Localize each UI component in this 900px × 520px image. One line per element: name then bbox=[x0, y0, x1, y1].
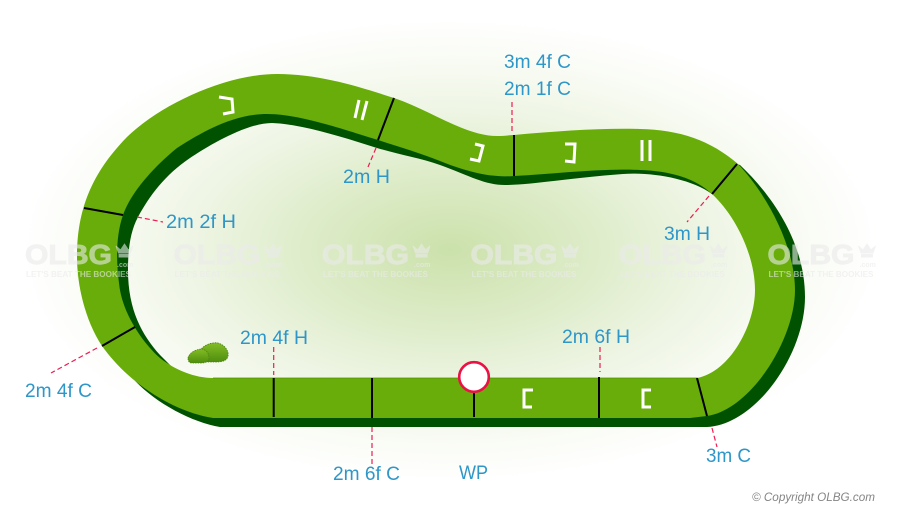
watermarks: OLBG bbox=[619, 239, 706, 270]
racetrack bbox=[77, 74, 805, 427]
watermarks: LET'S BEAT THE BOOKIES bbox=[768, 269, 874, 279]
watermarks: OLBG bbox=[322, 239, 409, 270]
watermarks: .com bbox=[562, 262, 579, 269]
watermarks: OLBG bbox=[470, 239, 558, 270]
watermarks bbox=[25, 239, 876, 279]
watermarks: OLBG bbox=[768, 239, 854, 270]
watermarks: OLBG bbox=[25, 239, 112, 270]
watermarks: LET'S BEAT THE BOOKIES bbox=[174, 269, 280, 279]
distance labels: 2m 6f C bbox=[333, 464, 400, 485]
distance labels: WP bbox=[459, 463, 488, 484]
dashed leader lines bbox=[51, 102, 717, 465]
watermarks: .com bbox=[266, 262, 282, 269]
distance labels: 2m 4f C bbox=[25, 381, 92, 402]
distance labels: 2m 6f H bbox=[562, 327, 630, 348]
watermarks: OLBG bbox=[174, 239, 260, 270]
watermarks: .com bbox=[414, 262, 430, 269]
track surface bbox=[77, 74, 795, 418]
watermarks: LET'S BEAT THE BOOKIES bbox=[620, 269, 725, 279]
watermarks: LET'S BEAT THE BOOKIES bbox=[26, 269, 131, 279]
track shadow edge bbox=[95, 90, 805, 427]
distance labels: 2m 1f C bbox=[504, 79, 571, 100]
distance labels bbox=[25, 52, 751, 485]
watermarks: .com bbox=[711, 262, 727, 269]
watermarks: LET'S BEAT THE BOOKIES bbox=[323, 269, 428, 279]
distance labels: 3m C bbox=[706, 446, 751, 467]
distance labels: 2m H bbox=[343, 167, 390, 188]
distance labels: 2m 2f H bbox=[166, 212, 236, 233]
icon: bush bbox=[188, 343, 228, 363]
distance labels: 3m H bbox=[664, 224, 710, 245]
distance labels: 2m 4f H bbox=[240, 328, 308, 349]
fences and hurdles bbox=[219, 97, 651, 407]
watermarks: LET'S BEAT THE BOOKIES bbox=[472, 269, 577, 279]
distance markers bbox=[84, 98, 737, 418]
watermarks: .com bbox=[860, 262, 876, 269]
distance labels: 3m 4f C bbox=[504, 52, 571, 73]
winning post marker bbox=[459, 362, 489, 392]
copyright: © Copyright OLBG.com bbox=[752, 490, 875, 504]
watermarks: .com bbox=[117, 262, 133, 269]
